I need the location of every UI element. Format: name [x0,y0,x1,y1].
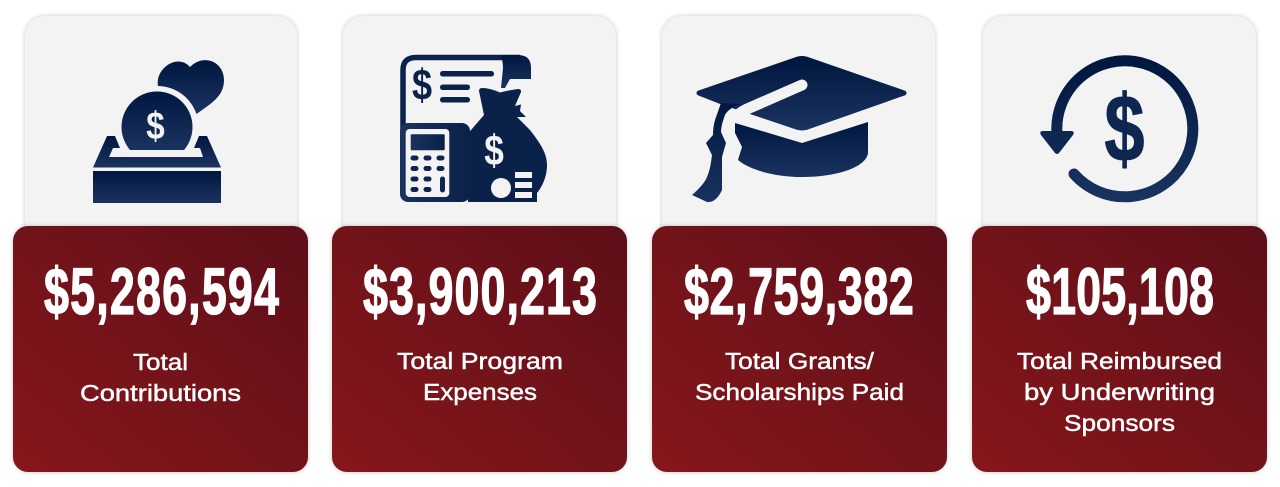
label: Scholarships Paid [695,379,904,405]
icon card [343,16,616,246]
panel: total reimbursed by underwriting sponsors [972,16,1267,472]
icon card [25,16,297,246]
panel: total program expenses [332,16,627,472]
icon: circular arrow with dollar sign: $ [1104,75,1145,181]
label [80,349,241,406]
label: by Underwriting [1024,379,1215,405]
amount: $3,900,213 [363,254,597,328]
amount: $2,759,382 [684,254,914,328]
label: Contributions [80,380,241,406]
icon: invoice, calculator and money bag: $ [412,61,432,110]
amount card [332,226,627,472]
label: Total Grants/ [725,348,875,374]
label: Sponsors [1064,410,1175,436]
icon: circular arrow with dollar sign [1040,61,1193,197]
label: Total Reimbursed [1017,348,1222,374]
icon: invoice, calculator and money bag [400,55,547,202]
label: Total Program [397,348,563,374]
icon card [983,16,1256,246]
amount card [13,226,308,472]
label [397,348,563,405]
label: Expenses [423,379,537,405]
label: Total [133,349,188,375]
label [695,348,904,405]
amount: $5,286,594 [44,254,279,328]
icon: coin dropping into donation box with heart [93,60,224,203]
icon card [662,16,935,246]
panel: total grants and scholarships paid [652,16,947,472]
label [1017,348,1222,436]
amount card [972,226,1267,472]
panel: total contributions [13,16,308,472]
icon: graduation cap [692,58,904,202]
amount: $105,108 [1026,254,1214,328]
amount card [652,226,947,472]
icon: invoice, calculator and money bag: $ [484,127,504,175]
icon: coin dropping into donation box with heart: $ [146,103,165,148]
